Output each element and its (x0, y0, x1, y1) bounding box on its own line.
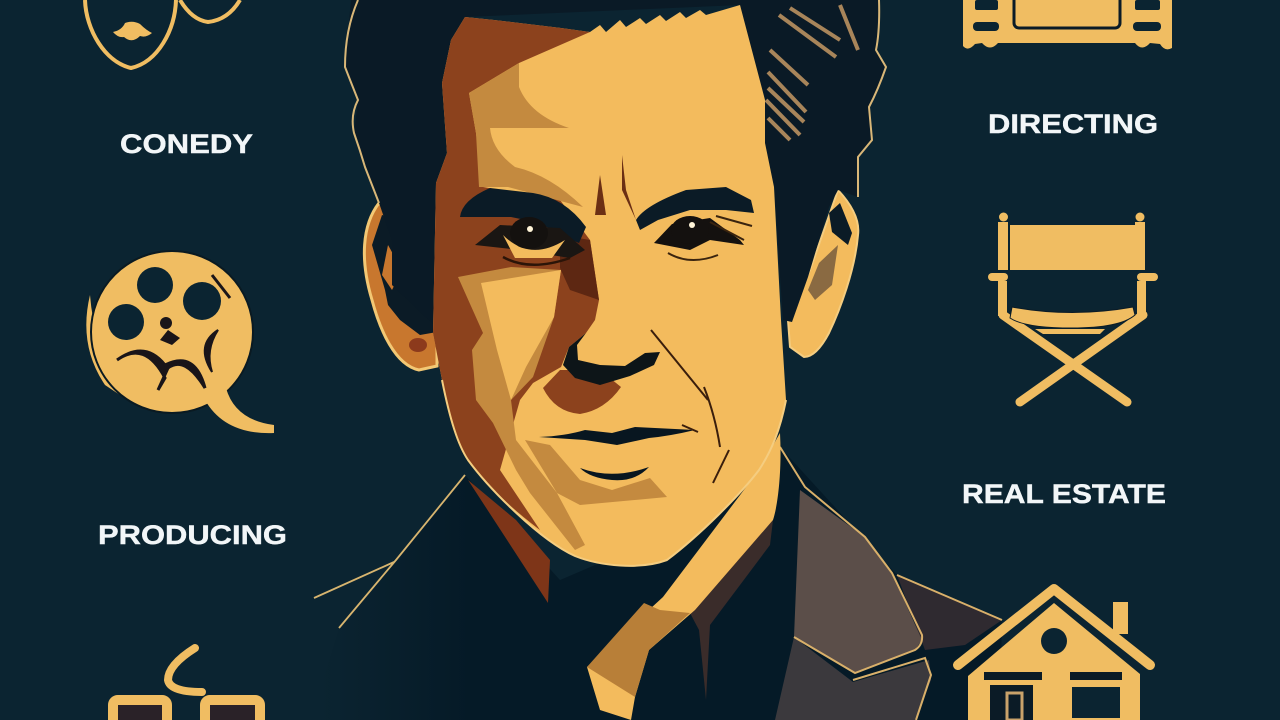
label: comedy: CONEDY (120, 129, 253, 159)
jacket and shirt (310, 447, 1002, 720)
under-nose shadow (543, 370, 621, 414)
chin shadow (525, 440, 667, 505)
inner shirt shadow (690, 520, 773, 700)
nose (563, 330, 708, 400)
icon: house (958, 589, 1150, 720)
jacket shoulder right (897, 575, 1002, 650)
label: directing: DIRECTING (988, 109, 1158, 139)
hair outline left (345, 0, 379, 203)
upper lapel (794, 490, 922, 673)
jaw outline (442, 380, 786, 566)
left eye (460, 188, 586, 265)
icon: film reel (86, 251, 274, 433)
eye socket shadow (560, 235, 599, 300)
left ear (364, 203, 437, 370)
icon: film strip (963, 0, 1172, 49)
jacket outlines (780, 447, 1002, 720)
cheek highlight (481, 270, 561, 400)
right eye (636, 187, 754, 260)
mouth (539, 387, 729, 483)
icon: bottom-left glasses (113, 648, 260, 720)
collar (587, 433, 781, 720)
icon: director's chair (988, 212, 1158, 402)
left shoulder lines (314, 475, 465, 628)
lower lapel (775, 637, 931, 720)
forehead midtone (469, 63, 583, 207)
hair (345, 0, 886, 327)
neck shadow (468, 480, 550, 603)
hair outline right (858, 0, 886, 197)
label: real estate: REAL ESTATE (962, 479, 1166, 509)
face (433, 5, 786, 566)
cheek midtone (458, 267, 585, 550)
label: producing: PRODUCING (98, 520, 287, 550)
right ear (788, 190, 858, 357)
brown shadow side (433, 17, 599, 530)
brow furrow lines (595, 155, 636, 220)
hair highlights (766, 5, 858, 140)
icon: theatre masks (85, 0, 240, 68)
